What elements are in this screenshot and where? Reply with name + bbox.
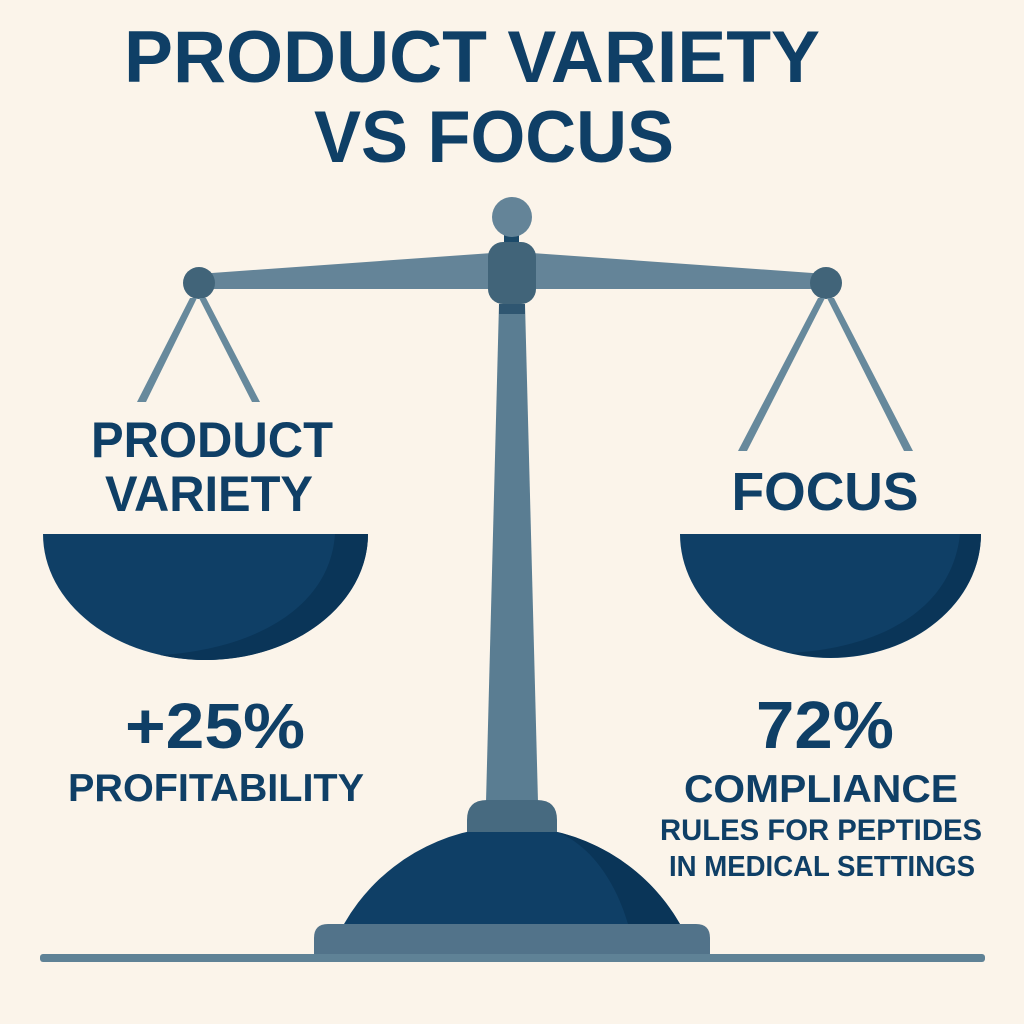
right pivot: [810, 267, 842, 299]
label: product variety: [91, 412, 333, 522]
right pan: [680, 534, 981, 658]
left pan: [43, 534, 368, 660]
stat: compliance: 72%: [756, 688, 894, 763]
central column: [486, 304, 538, 802]
stat: compliance: COMPLIANCE: [684, 768, 958, 811]
right beam: [532, 253, 826, 289]
title: [124, 17, 820, 178]
base collar: [467, 800, 557, 832]
stat: profitability: PROFITABILITY: [68, 767, 364, 810]
title: VS FOCUS: [314, 97, 674, 178]
stat: compliance: IN MEDICAL SETTINGS: [669, 851, 975, 883]
label: product variety: VARIETY: [105, 466, 313, 522]
scale top knob: [492, 197, 532, 237]
central hub: [488, 242, 536, 304]
ground line: [40, 954, 985, 962]
base plate: [314, 924, 710, 956]
neck: [504, 234, 519, 244]
label: product variety: PRODUCT: [91, 412, 333, 468]
column shadow band: [499, 304, 525, 314]
stat: compliance: [660, 688, 982, 883]
dome shade: [557, 832, 680, 924]
left pan strings: [137, 298, 260, 402]
title: PRODUCT VARIETY: [124, 17, 820, 98]
balance scale structure: [137, 197, 913, 956]
left pivot: [183, 267, 215, 299]
left beam: [198, 253, 492, 289]
stat: compliance: RULES FOR PEPTIDES: [660, 814, 982, 847]
right pan strings: [738, 298, 913, 451]
stat: profitability: [68, 690, 364, 810]
label: focus: FOCUS: [732, 462, 918, 522]
base dome: [344, 827, 680, 924]
stat: profitability: +25%: [125, 690, 305, 762]
